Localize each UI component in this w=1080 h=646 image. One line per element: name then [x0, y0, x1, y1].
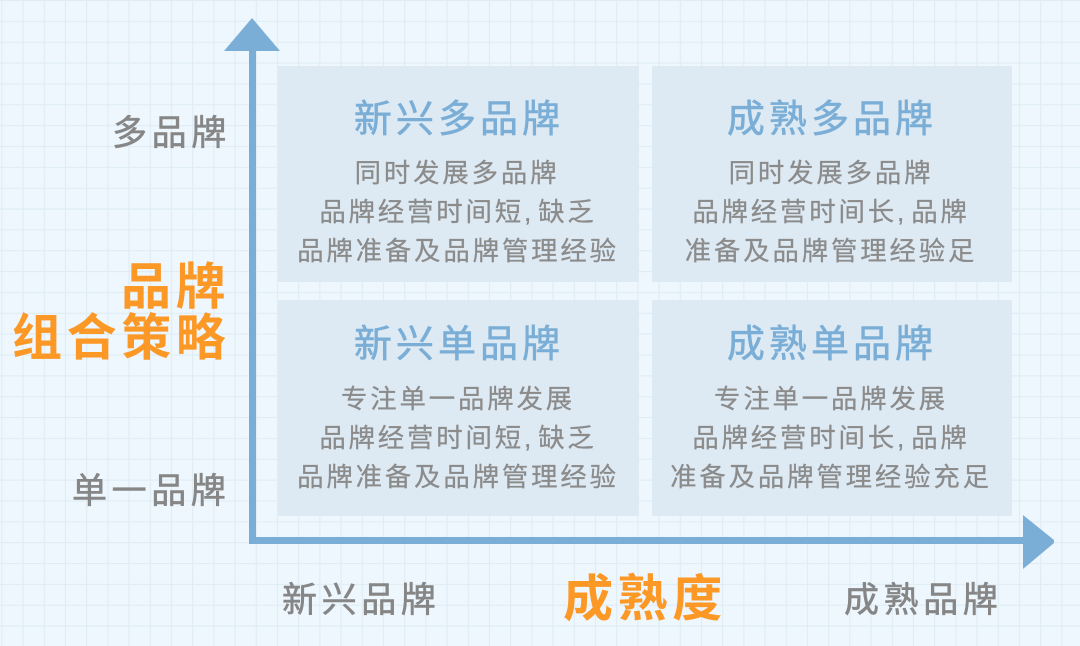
label: multi-brand: 多品牌: [112, 114, 231, 153]
text block: emerging single brand description: 品牌经营时间短,缺乏: [319, 423, 597, 453]
text block: mature multi-brand description: 同时发展多品牌: [729, 158, 933, 188]
panel: emerging multi-brand: [278, 66, 639, 282]
heading: emerging single brand: 新兴单品牌: [354, 324, 564, 366]
arrow: vertical axis: [224, 18, 280, 544]
heading: emerging multi-brand: 新兴多品牌: [354, 99, 564, 141]
label: emerging brands: 新兴品牌: [282, 581, 440, 620]
text block: emerging multi-brand description: 同时发展多品牌: [355, 158, 559, 188]
text block: emerging single brand description: 专注单一品牌发展: [341, 384, 575, 414]
heading: mature single brand: 成熟单品牌: [727, 324, 937, 366]
label: single brand: 单一品牌: [72, 472, 230, 511]
text block: mature single brand description: [670, 384, 992, 492]
panel: mature multi-brand: [652, 66, 1012, 282]
label: mature brands: 成熟品牌: [844, 581, 1002, 620]
text block: mature multi-brand description: [685, 158, 977, 266]
text block: mature multi-brand description: 准备及品牌管理经验足: [685, 236, 977, 266]
text block: emerging multi-brand description: 品牌准备及品牌管理经验: [297, 236, 619, 266]
axis title: brand portfolio strategy: 组合策略: [12, 310, 230, 366]
text block: mature single brand description: 专注单一品牌发展: [714, 384, 948, 414]
text block: emerging multi-brand description: [297, 158, 619, 266]
heading: mature multi-brand: 成熟多品牌: [727, 99, 937, 141]
axis title: maturity: 成熟度: [563, 571, 727, 627]
axis title: brand portfolio strategy: 品牌: [121, 259, 230, 315]
panel: mature single brand: [652, 300, 1012, 516]
text block: mature single brand description: 品牌经营时间长,品牌: [692, 423, 970, 453]
arrow: horizontal axis: [249, 515, 1054, 569]
axis title: brand portfolio strategy: [12, 259, 230, 366]
text block: emerging single brand description: 品牌准备及品牌管理经验: [297, 462, 619, 492]
text block: mature single brand description: 准备及品牌管理经验充足: [670, 462, 992, 492]
text block: emerging single brand description: [297, 384, 619, 492]
text block: emerging multi-brand description: 品牌经营时间短,缺乏: [319, 197, 597, 227]
panel: emerging single brand: [278, 300, 639, 516]
text block: mature multi-brand description: 品牌经营时间长,品牌: [692, 197, 970, 227]
